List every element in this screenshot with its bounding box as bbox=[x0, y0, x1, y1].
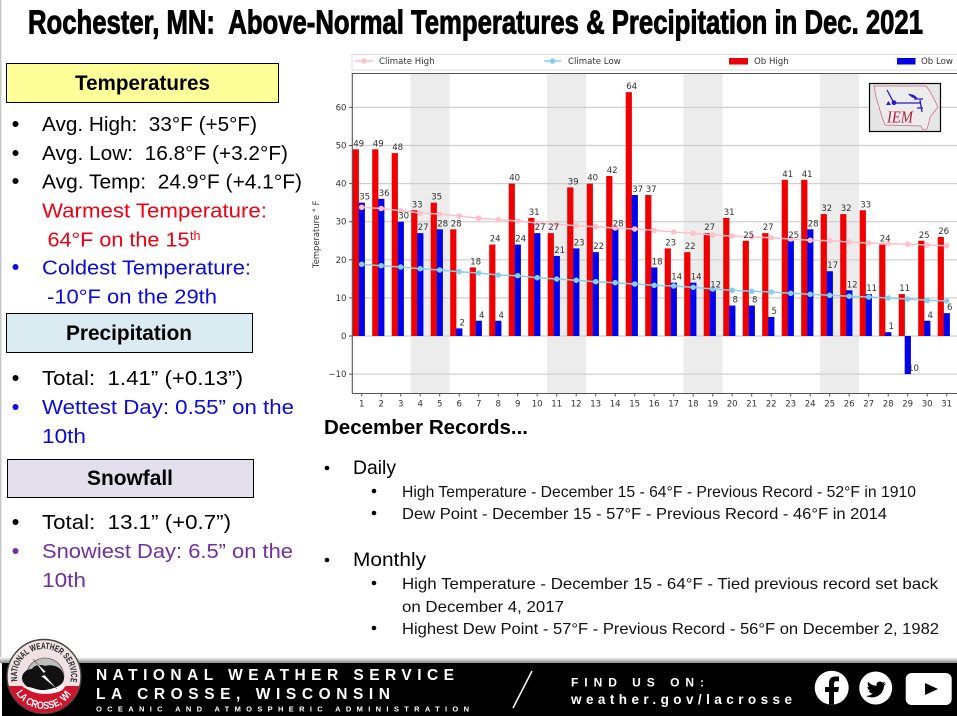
value labels: observed high: 18 bbox=[470, 257, 481, 267]
value labels: observed high: 25 bbox=[919, 231, 930, 241]
value labels: observed high: 42 bbox=[607, 166, 618, 176]
x axis labels: 31 bbox=[941, 400, 952, 410]
y axis labels bbox=[328, 104, 346, 380]
x axis labels: 29 bbox=[902, 400, 913, 410]
value labels: observed high bbox=[353, 82, 949, 294]
value labels: observed high: 24 bbox=[880, 235, 891, 245]
value labels: observed high: 33 bbox=[860, 200, 871, 210]
value labels: observed high: 33 bbox=[412, 200, 423, 210]
x axis labels: 24 bbox=[805, 400, 816, 410]
x axis labels: 1 bbox=[359, 400, 364, 410]
text block: monthly records: on December 4, 2017 bbox=[402, 599, 564, 616]
value labels: observed low: 36 bbox=[379, 189, 390, 199]
value labels: observed low: 30 bbox=[398, 212, 409, 222]
text: wettest day: Wettest Day: 0.55” on the bbox=[42, 397, 294, 419]
value labels: observed high: 40 bbox=[587, 174, 598, 184]
heading: precipitation: Precipitation bbox=[66, 322, 192, 345]
x axis labels: 30 bbox=[922, 400, 933, 410]
value labels: observed high: 48 bbox=[392, 143, 403, 153]
x axis labels: 5 bbox=[437, 400, 442, 410]
text block: monthly records: Highest Dew Point - 57°F - Previous Record - 56°F on December 2, 1982 bbox=[402, 621, 939, 638]
value labels: observed low: 8 bbox=[752, 296, 757, 306]
logo: IEM bbox=[870, 84, 940, 132]
text: snowiest day: Snowiest Day: 6.5” on the bbox=[42, 541, 293, 563]
value labels: observed high: 25 bbox=[743, 231, 754, 241]
footer text: find us: weather.gov/lacrosse bbox=[570, 692, 792, 707]
legend bbox=[352, 54, 957, 70]
x axis labels: 15 bbox=[629, 400, 640, 410]
text: coldest temperature bbox=[12, 258, 251, 308]
x axis labels: 28 bbox=[883, 400, 894, 410]
text: precipitation total: Total: 1.41” (+0.13”) bbox=[42, 368, 243, 390]
x axis labels: 4 bbox=[417, 400, 423, 410]
value labels: observed low: 28 bbox=[613, 219, 624, 229]
value labels: observed high: 24 bbox=[490, 235, 501, 245]
x axis labels: 9 bbox=[515, 400, 520, 410]
value labels: observed high: 28 bbox=[451, 219, 462, 229]
value labels: observed high: 11 bbox=[899, 284, 910, 294]
y axis title: Temperature ° F bbox=[311, 200, 321, 269]
heading: temperatures: Temperatures bbox=[75, 72, 210, 95]
value labels: observed low: 21 bbox=[554, 246, 565, 256]
bars: observed low bbox=[359, 195, 950, 374]
text: coldest temperature: Coldest Temperature: bbox=[42, 258, 251, 280]
y axis labels: 0 bbox=[341, 332, 346, 342]
text: wettest day: 10th bbox=[42, 426, 86, 448]
logo: National Weather Service La Crosse: NATIONAL WEATHER SERVICE bbox=[10, 642, 78, 682]
text block: daily records: Dew Point - December 15 - 57°F - Previous Record - 46°F in 2014 bbox=[402, 506, 887, 523]
value labels: observed high: 27 bbox=[763, 223, 774, 233]
x axis labels: 18 bbox=[688, 400, 699, 410]
value labels: observed low: 17 bbox=[827, 261, 838, 271]
value labels: observed low: 23 bbox=[574, 238, 585, 248]
value labels: observed low: -10 bbox=[905, 364, 919, 374]
value labels: observed high: 31 bbox=[724, 208, 735, 218]
value labels: observed low: 14 bbox=[671, 273, 682, 283]
logo: IEM: IEM bbox=[886, 108, 914, 127]
footer text: find us bbox=[570, 676, 792, 707]
value labels: observed low: 28 bbox=[437, 219, 448, 229]
x axis labels bbox=[359, 400, 952, 410]
footer text: office name: OCEANIC AND ATMOSPHERIC ADMINISTRATION bbox=[96, 704, 469, 714]
footer text: find us: FIND US ON: bbox=[571, 676, 704, 690]
divider slash bbox=[513, 671, 532, 708]
bars: observed high bbox=[353, 92, 944, 336]
x axis labels: 2 bbox=[378, 400, 384, 410]
x axis labels: 14 bbox=[610, 400, 621, 410]
logo: National Weather Service La Crosse: LA CROSSE, WI bbox=[16, 689, 71, 709]
value labels: observed high: 26 bbox=[938, 227, 949, 237]
value labels: observed low: 27 bbox=[418, 223, 429, 233]
value labels: observed high: 41 bbox=[782, 170, 793, 180]
bar chart: daily temperatures bbox=[311, 54, 957, 410]
x axis labels: 13 bbox=[590, 400, 601, 410]
line: climate low bbox=[359, 262, 950, 304]
y axis labels: 60 bbox=[336, 104, 346, 114]
text: average low: Avg. Low: 16.8°F (+3.2°F) bbox=[42, 143, 288, 165]
x axis labels: 23 bbox=[785, 400, 796, 410]
logo: National Weather Service La Crosse bbox=[6, 638, 82, 714]
footer text: office name: NATIONAL WEATHER SERVICE bbox=[96, 667, 454, 684]
text: warmest temperature: th bbox=[190, 229, 200, 243]
weekend bands bbox=[410, 74, 859, 394]
value labels: observed high: 22 bbox=[685, 242, 696, 252]
icon: facebook bbox=[815, 671, 849, 705]
value labels: observed high: 37 bbox=[646, 185, 657, 195]
y axis labels: 50 bbox=[336, 142, 346, 152]
x axis labels: 8 bbox=[495, 400, 501, 410]
text: snowfall total: Total: 13.1” (+0.7”) bbox=[42, 512, 231, 534]
value labels: observed high: 32 bbox=[821, 204, 832, 214]
text: wettest day bbox=[12, 397, 294, 448]
x axis labels: 16 bbox=[649, 400, 660, 410]
footer text: office name: LA CROSSE, WISCONSIN bbox=[96, 686, 390, 703]
value labels: observed low: 12 bbox=[847, 280, 858, 290]
value labels: observed high: 41 bbox=[802, 170, 813, 180]
legend: Climate High bbox=[379, 57, 435, 67]
y axis labels: −10 bbox=[328, 370, 346, 380]
value labels: observed low: 27 bbox=[535, 223, 546, 233]
x axis labels: 12 bbox=[571, 400, 582, 410]
x axis labels: 22 bbox=[766, 400, 777, 410]
legend: Ob Low bbox=[921, 57, 953, 67]
axes bbox=[349, 74, 957, 396]
text block: monthly records: Monthly bbox=[353, 550, 427, 571]
text: average temperature: Avg. Temp: 24.9°F (+4.1°F) bbox=[42, 172, 302, 194]
x axis labels: 10 bbox=[532, 400, 543, 410]
text: snowiest day bbox=[12, 541, 293, 592]
text block: daily records bbox=[325, 458, 916, 523]
value labels: observed low: 11 bbox=[866, 284, 877, 294]
value labels: observed high: 39 bbox=[568, 177, 579, 187]
text: warmest temperature: 64°F on the 15 bbox=[48, 230, 190, 252]
value labels: observed low: 37 bbox=[632, 185, 643, 195]
value labels: observed low: 14 bbox=[691, 273, 702, 283]
value labels: observed low: 18 bbox=[652, 257, 663, 267]
y axis labels: 10 bbox=[336, 294, 346, 304]
icon: youtube bbox=[906, 673, 952, 705]
value labels: observed high: 27 bbox=[704, 223, 715, 233]
panel: snowfall bbox=[8, 460, 293, 592]
x axis labels: 3 bbox=[398, 400, 403, 410]
y axis labels: 40 bbox=[336, 180, 346, 190]
value labels: observed high: 31 bbox=[529, 208, 540, 218]
value labels: observed high: 49 bbox=[353, 139, 364, 149]
heading: snowfall: Snowfall bbox=[87, 467, 173, 490]
legend: Ob High bbox=[754, 57, 789, 67]
value labels: observed low: 4 bbox=[479, 311, 484, 321]
footer banner bbox=[0, 638, 957, 716]
value labels: observed high: 32 bbox=[841, 204, 852, 214]
value labels: observed high: 35 bbox=[431, 193, 442, 203]
heading: precipitation bbox=[6, 314, 252, 352]
text block: monthly records: High Temperature - December 15 - 64°F - Tied previous record set back bbox=[402, 576, 939, 593]
value labels: observed low: 24 bbox=[515, 235, 526, 245]
text block: daily records: Daily bbox=[353, 458, 397, 479]
heading: December records: December Records... bbox=[324, 417, 528, 439]
icon: twitter bbox=[859, 672, 892, 704]
value labels: observed low: 28 bbox=[808, 219, 819, 229]
text: warmest temperature bbox=[42, 200, 267, 252]
x axis labels: 27 bbox=[863, 400, 874, 410]
heading: temperatures bbox=[6, 64, 278, 102]
value labels: observed low bbox=[359, 185, 952, 374]
value labels: observed high: 23 bbox=[665, 238, 676, 248]
value labels: observed low: 4 bbox=[927, 311, 933, 321]
value labels: observed low: 1 bbox=[888, 322, 894, 332]
value labels: observed low: 25 bbox=[788, 231, 799, 241]
x axis labels: 7 bbox=[476, 400, 481, 410]
text: coldest temperature: -10°F on the 29th bbox=[47, 286, 217, 308]
x axis labels: 25 bbox=[824, 400, 835, 410]
panel: precipitation bbox=[6, 314, 294, 448]
text: snowiest day: 10th bbox=[42, 570, 86, 592]
value labels: observed low: 22 bbox=[593, 242, 604, 252]
footer text: office name bbox=[96, 667, 469, 714]
x axis labels: 11 bbox=[551, 400, 562, 410]
x axis labels: 21 bbox=[746, 400, 757, 410]
line: climate high bbox=[359, 204, 950, 248]
text: average high: Avg. High: 33°F (+5°F) bbox=[42, 114, 257, 136]
value labels: observed low: 8 bbox=[732, 296, 738, 306]
y axis labels: 30 bbox=[336, 218, 346, 228]
y axis labels: 20 bbox=[336, 256, 346, 266]
value labels: observed low: 5 bbox=[771, 307, 777, 317]
text block: monthly records bbox=[325, 550, 939, 638]
heading: snowfall bbox=[8, 460, 254, 498]
x axis labels: 17 bbox=[668, 400, 679, 410]
value labels: observed high: 40 bbox=[509, 174, 520, 184]
panel: temperatures bbox=[6, 64, 302, 308]
value labels: observed low: 2 bbox=[459, 318, 465, 328]
value labels: observed low: 12 bbox=[710, 280, 721, 290]
value labels: observed high: 27 bbox=[548, 223, 559, 233]
text block: daily records: High Temperature - December 15 - 64°F - Previous Record - 52°F in 1910 bbox=[402, 484, 916, 501]
x axis labels: 6 bbox=[456, 400, 462, 410]
x axis labels: 20 bbox=[727, 400, 738, 410]
x axis labels: 19 bbox=[707, 400, 718, 410]
value labels: observed high: 64 bbox=[626, 82, 637, 92]
x axis labels: 26 bbox=[844, 400, 855, 410]
value labels: observed low: 6 bbox=[947, 303, 952, 313]
value labels: observed high: 49 bbox=[373, 139, 384, 149]
text: warmest temperature: Warmest Temperature: bbox=[42, 200, 267, 222]
legend: Climate Low bbox=[568, 57, 621, 67]
value labels: observed low: 35 bbox=[359, 193, 370, 203]
value labels: observed low: 4 bbox=[498, 311, 504, 321]
